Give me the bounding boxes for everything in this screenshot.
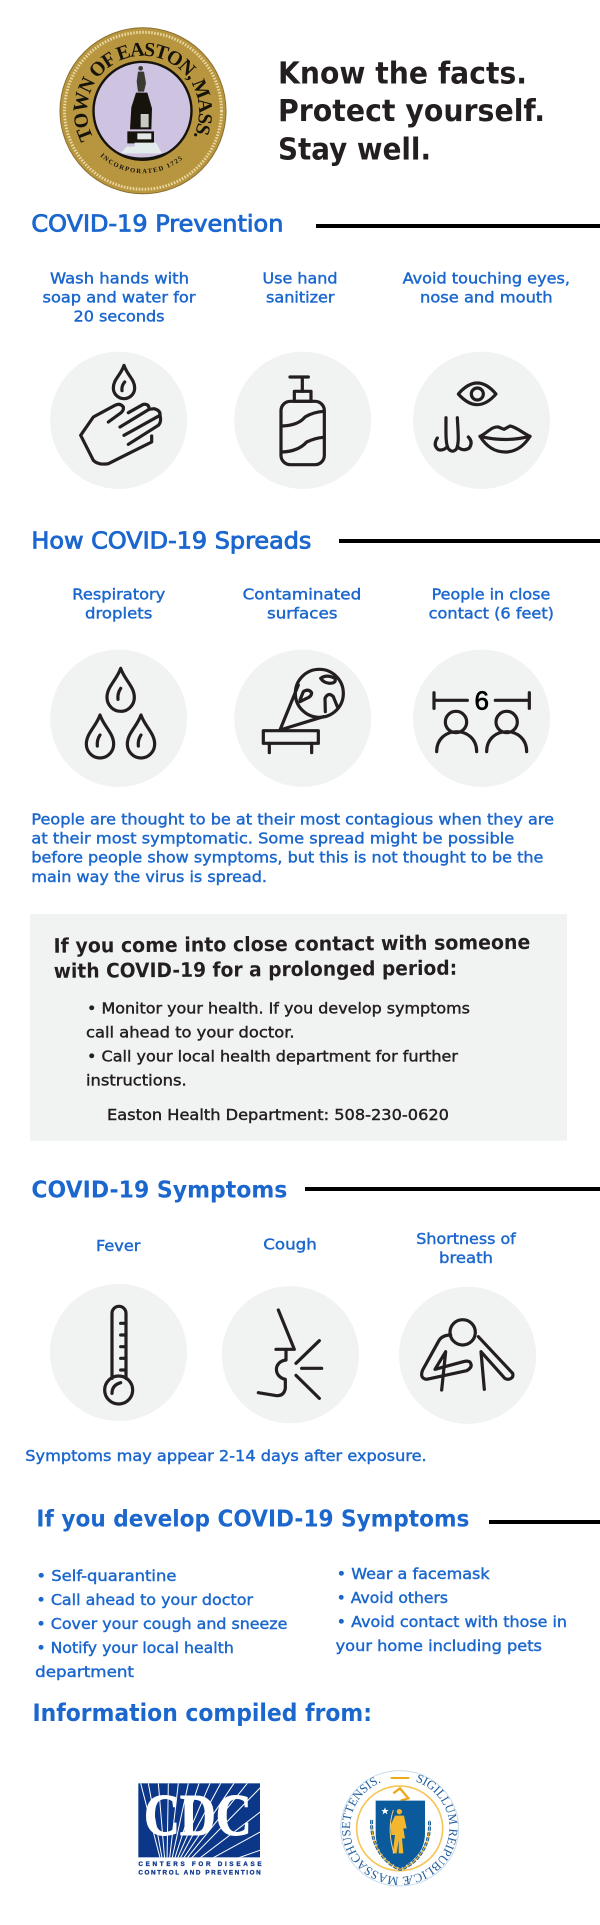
panel: prevention items (42, 269, 570, 489)
icon: three droplets (50, 650, 187, 787)
heading: information sources: Information compiled from: (32, 1699, 372, 1727)
label: respiratory droplets: Respiratory (72, 585, 165, 603)
label: respiratory droplets (72, 585, 165, 622)
advice list: • Call your local health department for further (87, 1047, 459, 1065)
icon: people six feet apart: 6 (474, 685, 489, 715)
label: avoid touching face: Avoid touching eyes, (403, 269, 570, 287)
panel: symptoms items (50, 1230, 536, 1424)
advice list: • Monitor your health. If you develop symptoms (87, 999, 470, 1017)
contact phone number: Easton Health Department: 508-230-0620 (107, 1106, 449, 1124)
label: wash hands: soap and water for (42, 288, 196, 306)
logo: Town of Easton seal (60, 27, 226, 194)
text block: contagion explanation: People are thought to be at their most contagious when they are (31, 810, 554, 828)
icon: eye, nose and mouth (413, 352, 550, 489)
logo: Town of Easton seal: INCORPORATED 1725 (100, 153, 182, 174)
icon: sanitizer bottle (234, 352, 371, 489)
logo: CDC: CENTERS FOR DISEASE (138, 1861, 262, 1868)
logo: Town of Easton seal: TOWN OF EASTON, MASS. (73, 42, 212, 143)
list: actions left column: • Cover your cough and sneeze (36, 1615, 287, 1633)
title: Protect yourself. (278, 94, 545, 129)
heading: COVID-19 Prevention: COVID-19 Prevention (31, 212, 283, 238)
icon: person short of breath (399, 1287, 536, 1424)
callout heading: If you come into close contact with someone (53, 930, 530, 958)
icon: globe over table (234, 650, 371, 787)
label: fever: Fever (96, 1237, 141, 1255)
label: close contact: contact (6 feet) (429, 604, 554, 622)
text block: contagion explanation: main way the virus is spread. (31, 868, 267, 886)
list: actions right column: • Avoid contact with those in (337, 1613, 567, 1631)
logo: CDC: CONTROL AND PREVENTION (138, 1869, 261, 1876)
label: shortness of breath: Shortness of (416, 1230, 517, 1248)
icon: thermometer (50, 1284, 187, 1421)
panel: close contact advice (30, 914, 567, 1141)
callout heading (53, 930, 531, 983)
heading: COVID-19 Prevention (31, 212, 600, 238)
title: Know the facts. (278, 56, 527, 91)
label: wash hands: Wash hands with (50, 269, 189, 287)
label: close contact (429, 585, 554, 622)
advice list: call ahead to your doctor. (86, 1023, 295, 1041)
label: close contact: People in close (432, 585, 550, 603)
label: hand sanitizer: Use hand (262, 269, 338, 287)
label: respiratory droplets: droplets (85, 604, 152, 622)
callout heading: with COVID-19 for a prolonged period: (54, 956, 457, 983)
label: wash hands: 20 seconds (74, 307, 165, 325)
icon: hand with water drop (50, 352, 187, 489)
label: contaminated surfaces: Contaminated (243, 585, 361, 603)
icon: people six feet apart (413, 650, 550, 787)
list: actions right column: • Wear a facemask (337, 1565, 490, 1583)
list: actions left column: • Notify your local health (36, 1639, 234, 1657)
label: hand sanitizer: sanitizer (266, 288, 335, 306)
list: actions left column: • Self-quarantine (36, 1567, 176, 1585)
heading: COVID-19 Symptoms (31, 1177, 600, 1203)
icon: cough profile (222, 1286, 359, 1423)
text block: contagion explanation: at their most symptomatic. Some spread might be possible (31, 829, 514, 847)
panel: how it spreads items (50, 585, 554, 787)
logo: CDC: CDC (144, 1782, 252, 1848)
label: contaminated surfaces: surfaces (267, 604, 338, 622)
label: hand sanitizer (262, 269, 338, 306)
label: cough: Cough (263, 1235, 317, 1253)
heading: How COVID-19 Spreads: How COVID-19 Spreads (31, 528, 311, 554)
heading: How COVID-19 Spreads (31, 528, 600, 554)
list: actions right column: your home including pets (336, 1637, 542, 1655)
text block: contagion explanation (31, 810, 554, 886)
title (278, 56, 545, 167)
advice list (86, 999, 470, 1089)
list: actions right column (336, 1565, 567, 1655)
list: actions left column: department (35, 1663, 134, 1681)
text block: contagion explanation: before people show symptoms, but this is not thought to be the (31, 848, 543, 866)
advice list: instructions. (86, 1071, 187, 1089)
label: contaminated surfaces (243, 585, 361, 622)
logo: Massachusetts state seal: SIGILLUM REIPUBLICÆ MASSACHUSETTENSIS. (342, 1774, 458, 1886)
label: avoid touching face (403, 269, 570, 306)
logo: CDC (138, 1782, 262, 1883)
list: actions left column (35, 1567, 287, 1681)
label: wash hands (42, 269, 196, 325)
text block: symptom onset: Symptoms may appear 2-14 days after exposure. (25, 1447, 427, 1465)
list: actions left column: • Call ahead to your doctor (36, 1591, 254, 1609)
list: actions right column: • Avoid others (337, 1589, 448, 1607)
label: shortness of breath: breath (439, 1249, 493, 1267)
label: avoid touching face: nose and mouth (420, 288, 553, 306)
heading: If you develop COVID-19 Symptoms: If you develop COVID-19 Symptoms (36, 1507, 469, 1533)
label: shortness of breath (416, 1230, 517, 1267)
title: Stay well. (278, 132, 431, 167)
heading: COVID-19 Symptoms: COVID-19 Symptoms (31, 1177, 287, 1203)
